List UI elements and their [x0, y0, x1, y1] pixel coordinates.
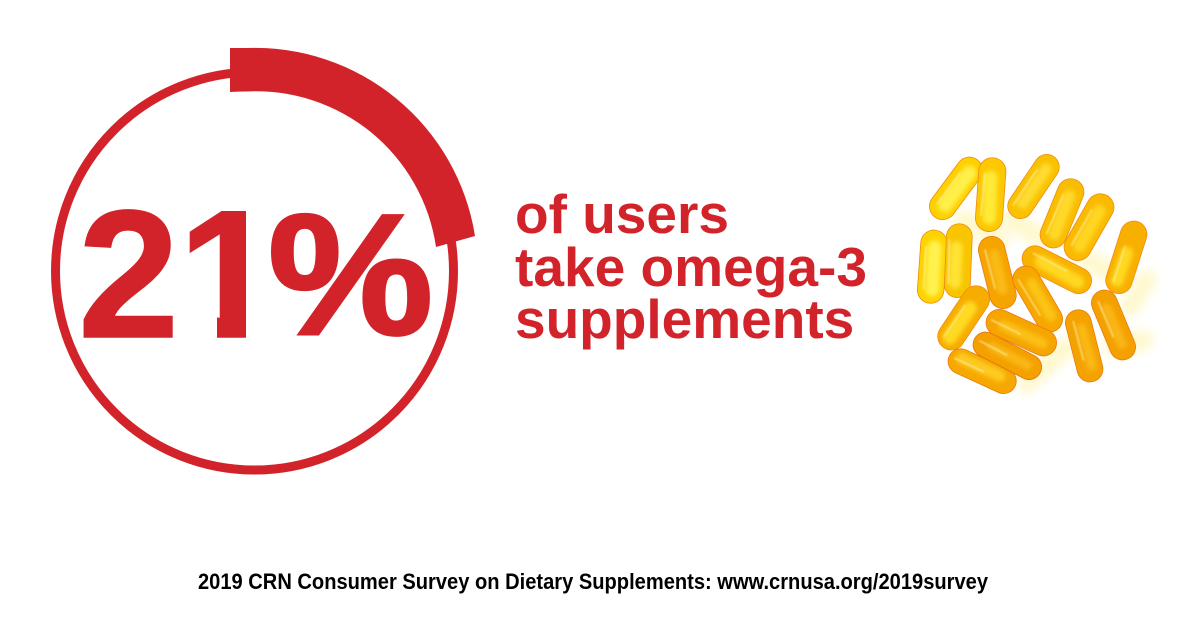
capsule 14	[986, 345, 1029, 367]
capsule 4	[1053, 192, 1071, 235]
capsule 9	[992, 250, 1003, 295]
capsule 10	[1035, 259, 1079, 282]
capsule 3	[1020, 167, 1047, 206]
big percentage	[84, 209, 430, 338]
line: of users: of users	[515, 183, 729, 245]
capsule 12	[950, 299, 976, 337]
line: supplements: supplements	[515, 288, 854, 350]
capsule highlights	[923, 170, 1125, 372]
thick arc segment	[230, 48, 475, 247]
source footer: 2019 CRN Consumer Survey on Dietary Supplements: www.crnusa.org/2019survey	[198, 569, 988, 594]
capsule 5	[1078, 207, 1100, 247]
capsule 8	[955, 237, 959, 285]
photo illustration: omega-3 softgel capsules	[923, 167, 1147, 383]
capsule 15	[961, 358, 1004, 381]
statement text	[515, 183, 867, 350]
capsule 16	[1078, 323, 1092, 369]
thin full circle	[56, 72, 454, 470]
capsule 2	[989, 171, 992, 218]
capsule 6	[1117, 234, 1134, 281]
capsule 7	[931, 243, 935, 290]
capsule 1	[943, 170, 969, 206]
capsule 11	[1026, 279, 1051, 319]
digit 1: 1	[178, 172, 279, 376]
capsule glow	[963, 220, 1147, 383]
capsule 13	[999, 323, 1043, 343]
percent sign: %	[268, 178, 433, 371]
capsule 17	[1104, 303, 1123, 347]
line: take omega-3: take omega-3	[515, 236, 867, 298]
progress ring: 21 percent	[56, 48, 475, 470]
digit 2: 2	[78, 172, 179, 376]
